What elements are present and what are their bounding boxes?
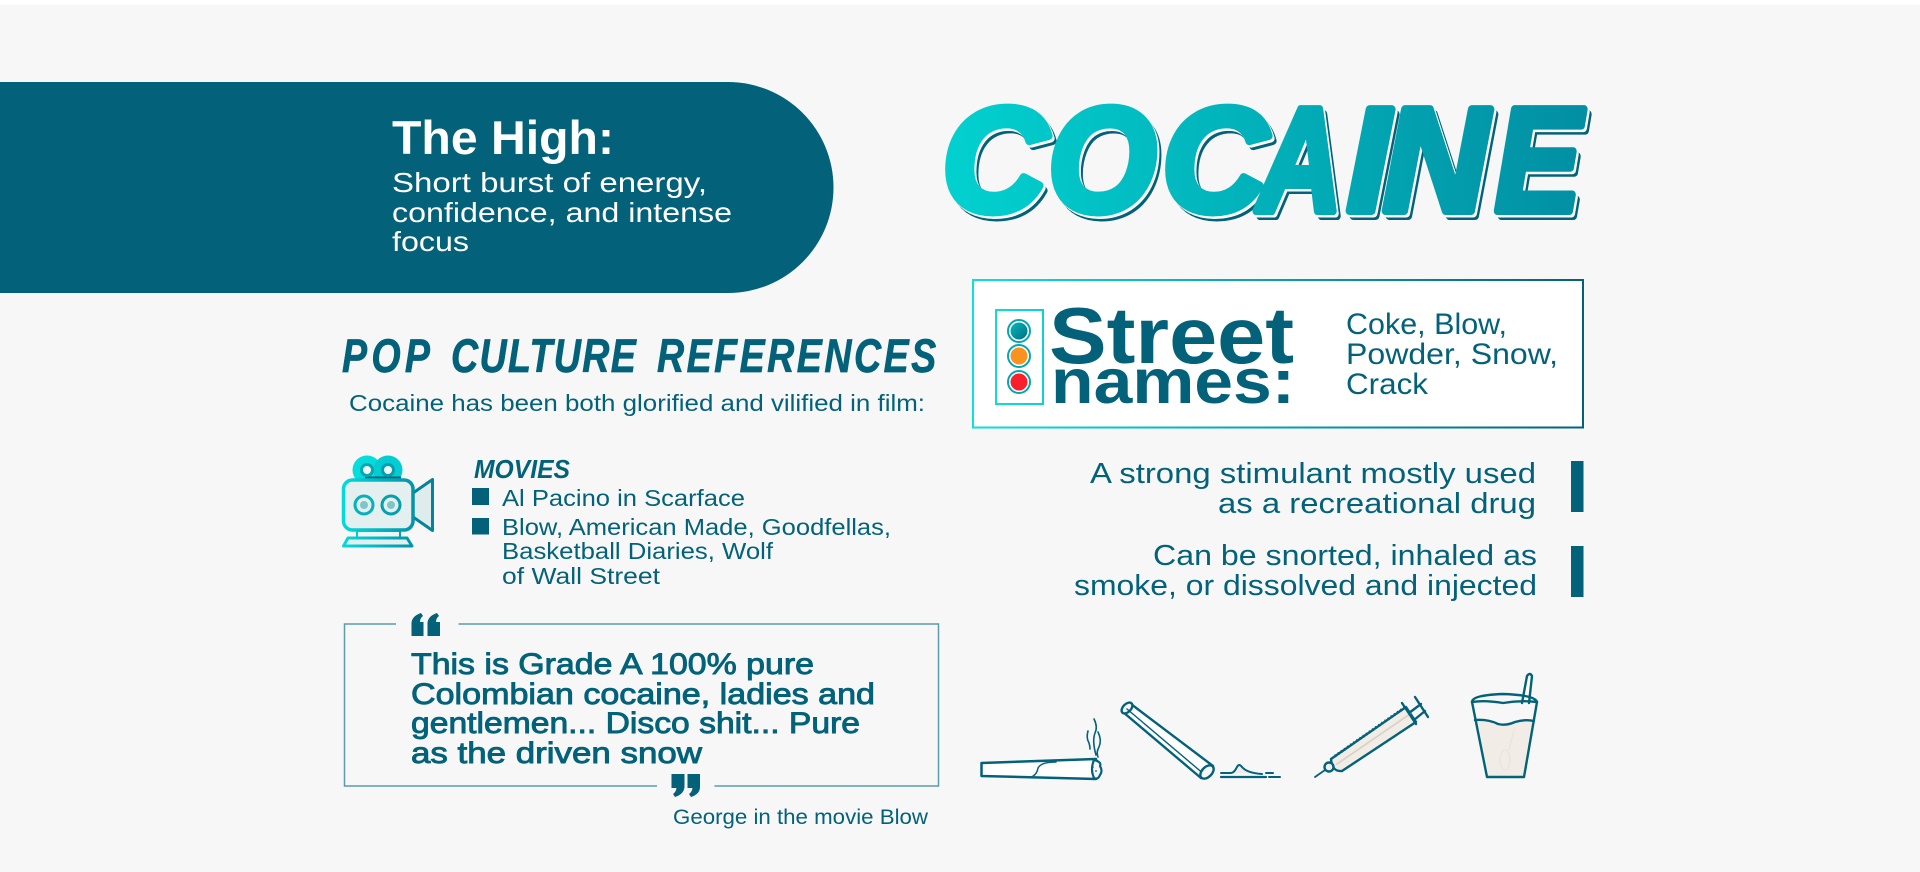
heading: street names: names:: [1051, 347, 1295, 417]
heading: pop culture references: CULTURE: [451, 330, 637, 383]
text block: street name list: Coke, Blow,: [1346, 308, 1507, 341]
heading: the high: The High:: [392, 111, 614, 164]
text block: quote attribution: George in the movie Blow: [673, 806, 929, 829]
title: cocaine: E: [1499, 83, 1589, 248]
icon: straw and powder: [1120, 701, 1280, 781]
title: cocaine: C: [1162, 78, 1269, 243]
title: cocaine: C: [946, 83, 1053, 248]
title: cocaine: A: [1257, 80, 1344, 246]
text block: stimulant fact: as a recreational drug: [1218, 488, 1536, 520]
text block: quote: [411, 648, 875, 770]
text block: movies list: Basketball Diaries, Wolf: [502, 538, 774, 564]
title: cocaine: E: [1495, 78, 1585, 243]
text block: quote: as the driven snow: [411, 737, 702, 770]
text block: stimulant fact: A strong stimulant mostly used: [1090, 458, 1536, 490]
icon: traffic light: [996, 310, 1043, 404]
title: cocaine: A: [1255, 78, 1342, 243]
icon: glass with spoon: [1472, 674, 1537, 777]
marker bar: stimulant fact: [1571, 461, 1584, 512]
title: cocaine: I: [1349, 80, 1394, 246]
text block: the high description: confidence, and intense: [392, 197, 732, 228]
title: cocaine: [942, 78, 1589, 248]
icon: syringe: [1315, 697, 1428, 777]
title: cocaine: I: [1351, 83, 1396, 248]
title: cocaine: N: [1387, 83, 1495, 248]
title: cocaine: I: [1347, 78, 1392, 243]
icon: closing quote: [672, 774, 700, 797]
title: cocaine: C: [942, 78, 1049, 243]
title: cocaine: C: [1166, 83, 1273, 248]
text block: movies list: [472, 485, 891, 589]
text block: the high description: Short burst of energy,: [392, 167, 707, 198]
title: cocaine: O: [1048, 78, 1156, 243]
panel: quote box: [344, 613, 938, 797]
text block: movies list: Al Pacino in Scarface: [502, 485, 745, 511]
title: cocaine: N: [1385, 80, 1493, 246]
title: cocaine: C: [1164, 80, 1271, 246]
heading: movies: MOVIES: [474, 454, 571, 484]
heading: pop culture references: [342, 330, 936, 383]
text block: street name list: Crack: [1346, 368, 1429, 401]
marker bar: usage fact: [1571, 546, 1584, 597]
bullet: other movies: [472, 518, 489, 534]
panel: street names: [973, 280, 1583, 428]
text block: quote: Colombian cocaine, ladies and: [411, 678, 875, 711]
title: cocaine: A: [1259, 83, 1346, 248]
text block: the high description: focus: [392, 226, 469, 257]
heading: street names: [1049, 291, 1295, 417]
title: cocaine: C: [944, 80, 1051, 246]
heading: pop culture references: POP: [342, 330, 431, 383]
icon: movie camera: [344, 456, 432, 546]
text block: movies list: of Wall Street: [502, 563, 661, 589]
text block: usage fact: Can be snorted, inhaled as: [1153, 540, 1537, 572]
icon: joint: [982, 719, 1102, 779]
title: cocaine: O: [1052, 83, 1160, 248]
text block: street name list: Powder, Snow,: [1346, 338, 1558, 371]
text block: quote: gentlemen... Disco shit... Pure: [411, 707, 860, 740]
text block: quote: This is Grade A 100% pure: [411, 648, 814, 681]
text block: film intro: Cocaine has been both glorified and vilified in film:: [349, 390, 925, 416]
heading: pop culture references: REFERENCES: [657, 330, 936, 383]
text block: usage fact: smoke, or dissolved and injected: [1074, 570, 1537, 602]
text block: street name list: [1346, 308, 1558, 401]
icon: opening quote: [412, 613, 440, 636]
text block: stimulant fact: [1090, 458, 1536, 520]
title: cocaine: E: [1497, 80, 1587, 246]
panel: the high: [0, 82, 834, 293]
text block: the high description: [392, 167, 732, 257]
heading: street names: Street: [1049, 291, 1294, 380]
text block: movies list: Blow, American Made, Goodfellas,: [502, 514, 891, 540]
title: cocaine: N: [1383, 78, 1491, 243]
bullet: scarface: [472, 488, 489, 505]
text block: usage fact: [1074, 540, 1537, 602]
title: cocaine: O: [1050, 80, 1158, 246]
